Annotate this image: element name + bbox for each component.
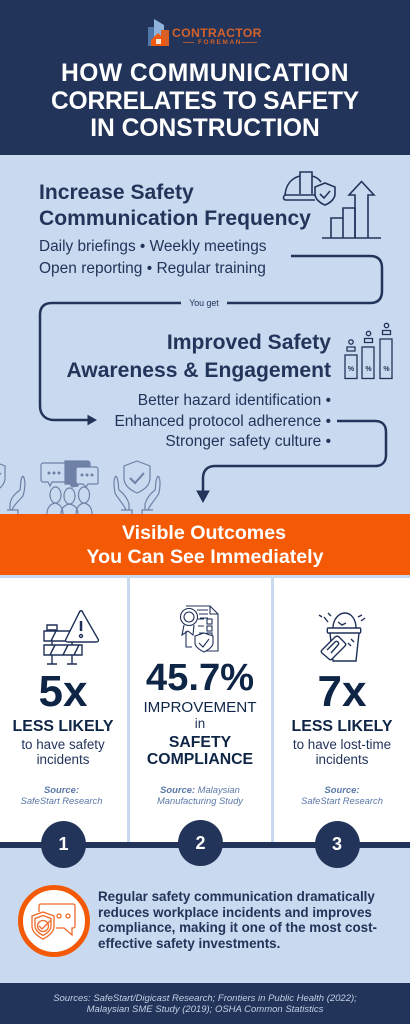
title — [51, 60, 359, 142]
stat label: incidents — [37, 752, 89, 767]
source: Manufacturing Study — [157, 794, 243, 806]
title: IN CONSTRUCTION — [90, 115, 320, 142]
heading: improved safety awareness and engagement: Improved Safety — [167, 330, 331, 354]
heading: improved safety awareness and engagement — [66, 330, 331, 382]
stat label: in — [195, 716, 205, 731]
arrow connector: second bend — [196, 420, 388, 503]
stat label: to have lost-time — [293, 737, 391, 752]
takeaway text: compliance, making it one of the most cost- — [98, 920, 377, 935]
card 3: 7x less likely — [292, 612, 392, 806]
panel: outcome cards background — [0, 578, 410, 843]
icon: rising bars with arrow — [322, 180, 381, 239]
number badge 3: 3 — [332, 834, 342, 854]
stat label: IMPROVEMENT — [143, 699, 257, 716]
icon: people on percentage bars: % — [348, 366, 355, 373]
icon: stopwatch bucket with plaster — [318, 612, 366, 662]
stat label: incidents — [316, 752, 368, 767]
label: you get — [181, 297, 227, 309]
icon: people on percentage bars — [344, 322, 393, 380]
stat label: COMPLIANCE — [147, 751, 253, 768]
icon: people on percentage bars: % — [365, 366, 372, 373]
stat label — [292, 718, 392, 767]
icon: hands holding shield left — [0, 464, 26, 514]
number badge 1 — [41, 821, 86, 868]
logo — [148, 19, 262, 46]
stat label: LESS LIKELY — [292, 718, 392, 735]
text: awareness benefits: Better hazard identification • — [138, 392, 331, 409]
label: you get: You get — [189, 298, 219, 308]
heading: increase safety communication frequency: Increase Safety — [39, 181, 194, 204]
source: Source: Malaysian — [160, 784, 240, 795]
icon: team with speech bubbles — [40, 460, 99, 514]
source — [301, 784, 383, 806]
title: CORRELATES TO SAFETY — [51, 88, 359, 114]
card 1: 5x less likely — [13, 610, 114, 806]
arrow connector: first bend — [38, 254, 384, 426]
icon: hard hat with shield — [282, 171, 336, 206]
text: communication practices: Open reporting • Regular training — [39, 260, 266, 277]
banner: visible outcomes: Visible Outcomes — [122, 522, 286, 544]
logo sub wordmark: FOREMAN — [198, 38, 242, 46]
logo wordmark: CONTRACTOR — [172, 26, 262, 40]
card 2: 45.7% improvement — [143, 606, 257, 806]
banner: visible outcomes: You Can See Immediately — [86, 546, 324, 568]
text: awareness benefits: Stronger safety culture • — [165, 433, 331, 450]
source: Source: — [325, 784, 359, 795]
stat label — [143, 699, 257, 768]
takeaway text — [98, 889, 377, 951]
stat: 5x: 5x — [39, 667, 87, 716]
icon: hands holding shield right — [113, 460, 161, 514]
footer sources text — [53, 993, 357, 1015]
stat label — [13, 718, 114, 767]
heading: increase safety communication frequency — [39, 181, 311, 230]
footer — [0, 983, 410, 1024]
text: communication practices: Daily briefings • Weekly meetings — [39, 238, 267, 255]
heading: improved safety awareness and engagement: Awareness & Engagement — [66, 359, 331, 382]
icon: people on percentage bars: % — [383, 366, 390, 373]
header panel — [0, 0, 410, 155]
text: communication practices — [39, 238, 267, 277]
stat: 7x: 7x — [318, 667, 366, 716]
source — [21, 784, 102, 806]
source: SafeStart Research — [301, 794, 383, 806]
banner: visible outcomes — [0, 514, 410, 575]
footer sources text: Malaysian SME Study (2019); OSHA Common Statistics — [87, 1004, 323, 1015]
takeaway text: Regular safety communication dramatically — [98, 889, 375, 904]
number badge 1: 1 — [58, 834, 68, 854]
source: SafeStart Research — [21, 794, 102, 806]
number badge 3 — [314, 821, 360, 868]
icon: road barrier with warning sign — [43, 610, 100, 665]
logo icon: buildings and house — [148, 19, 169, 46]
takeaway text: reduces workplace incidents and improves — [98, 905, 372, 920]
column divider 2 — [271, 578, 274, 843]
column divider 1 — [126, 578, 130, 843]
footer sources text: Sources: SafeStart/Digicast Research; Frontiers in Public Health (2022); — [53, 993, 357, 1004]
icon: shield with speech bubble in orange circle — [18, 885, 90, 957]
stat label: SAFETY — [169, 734, 231, 751]
timeline bar — [0, 842, 410, 848]
source: Source: — [44, 784, 79, 795]
takeaway text: effective safety investments. — [98, 936, 280, 951]
heading: increase safety communication frequency: Communication Frequency — [39, 206, 311, 230]
icon: certificate with shield — [180, 606, 219, 653]
stat label: LESS LIKELY — [13, 718, 113, 735]
number badge 2: 2 — [195, 832, 206, 852]
stat: 45.7%: 45.7% — [146, 656, 254, 699]
text: awareness benefits: Enhanced protocol adherence • — [114, 412, 331, 430]
number badge 2 — [178, 820, 223, 866]
stat label: to have safety — [21, 737, 105, 752]
title: HOW COMMUNICATION — [61, 60, 349, 87]
text: awareness benefits — [114, 392, 331, 450]
source — [157, 784, 244, 806]
